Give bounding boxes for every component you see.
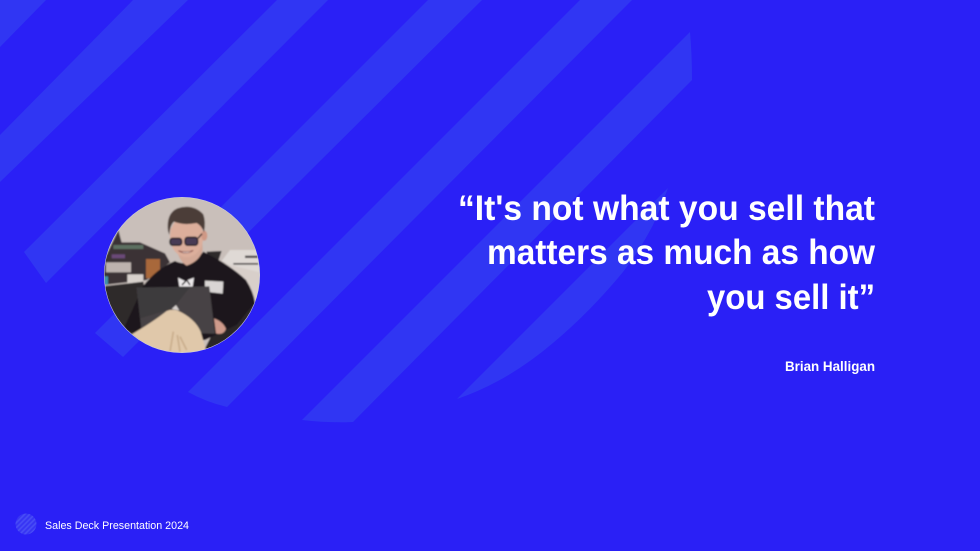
pillow: [132, 310, 206, 355]
neck and face: [170, 228, 203, 266]
quote text: [458, 189, 876, 317]
name tag: [205, 281, 223, 294]
attribution: Brian Halligan: Brian Halligan: [785, 358, 875, 374]
glasses: [170, 237, 198, 245]
sweater: [123, 252, 255, 342]
shelves left: [103, 230, 170, 285]
hand: [214, 318, 226, 334]
footer icon: striped circle: [16, 514, 36, 534]
sweater logo: [178, 278, 194, 287]
quote text: “It's not what you sell that: [458, 189, 875, 228]
wall: [105, 198, 256, 348]
portrait photo of man with laptop: [104, 197, 260, 353]
sofa: [105, 280, 145, 339]
laptop: [137, 286, 215, 334]
hair: [168, 207, 205, 235]
quote text: you sell it”: [707, 278, 875, 317]
diagonal background stripes: [0, 0, 692, 422]
table and objects right: [207, 251, 222, 261]
smile: [178, 250, 193, 253]
footer text: Sales Deck Presentation 2024: [45, 520, 189, 532]
quote text: matters as much as how: [487, 233, 876, 272]
